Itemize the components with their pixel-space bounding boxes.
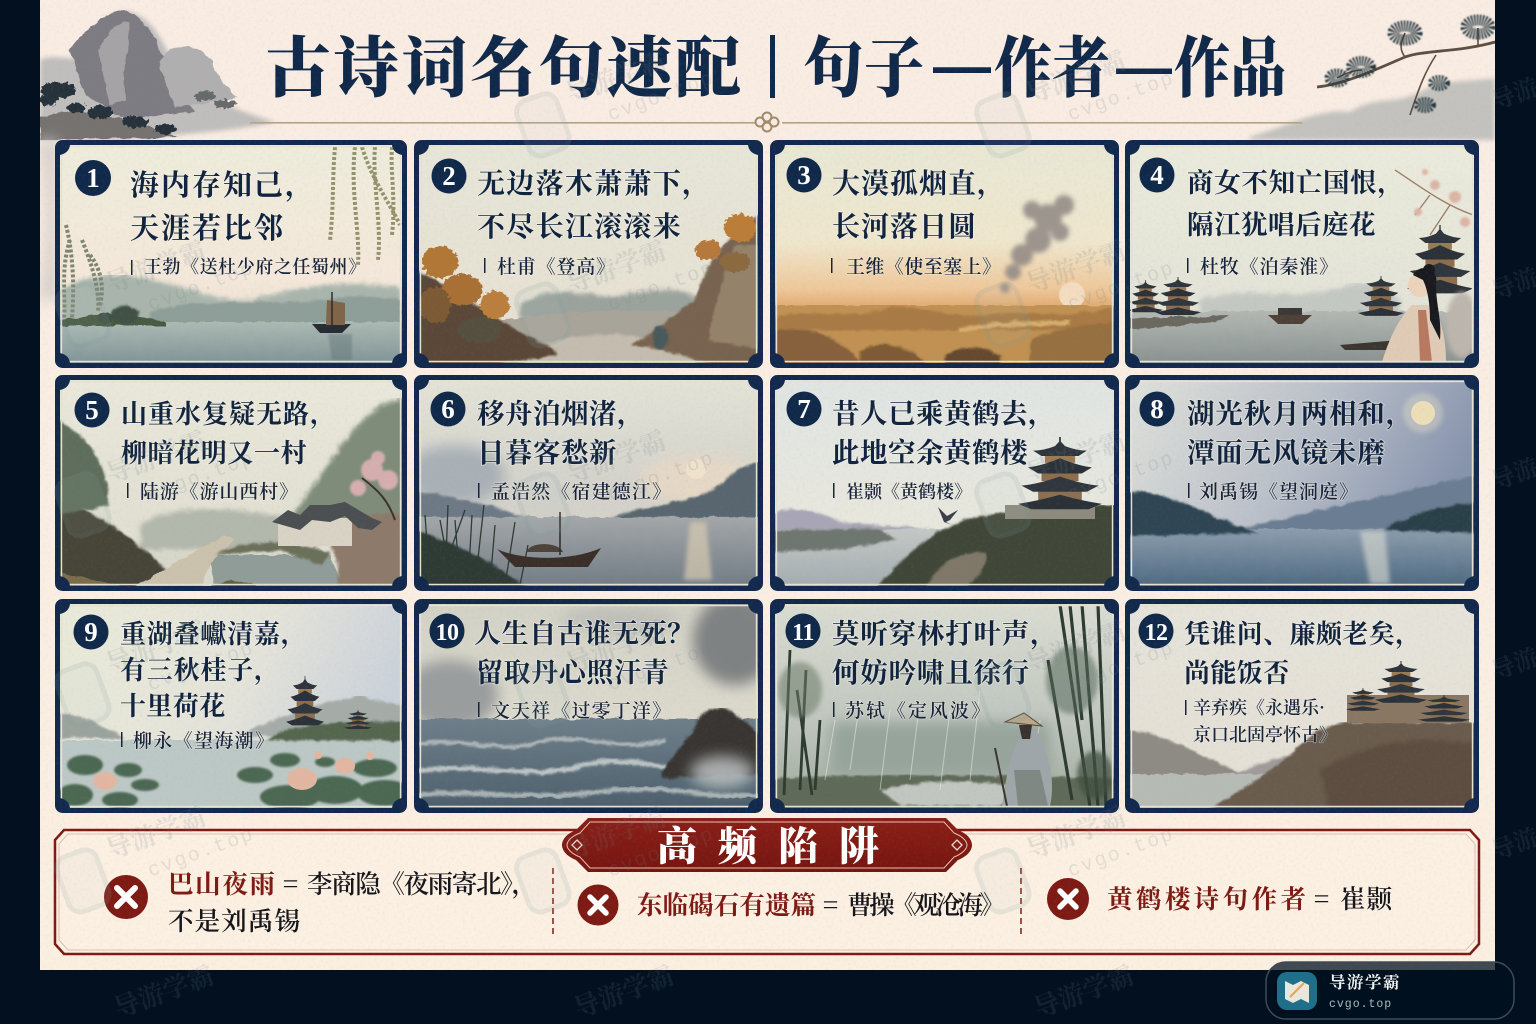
number badge 10: 10 <box>436 620 459 646</box>
number badge 6: 6 <box>441 394 455 424</box>
quote 12 <box>1184 614 1422 690</box>
number badge 5: 5 <box>85 395 99 425</box>
author 3: 王维《使至塞上》 <box>846 252 1001 279</box>
quote 3: 长河落日圆 <box>832 205 977 245</box>
author 12: 京口北固亭怀古》 <box>1193 721 1337 747</box>
title: — <box>1116 35 1172 98</box>
watermark overlay: 导游学霸 <box>108 955 218 1024</box>
quote 9: 十里荷花 <box>120 686 226 723</box>
dashed divider <box>1020 868 1022 935</box>
quote 3: 大漠孤烟直， <box>832 162 1006 202</box>
quote 12: 凭谁问、廉颇老矣， <box>1184 614 1422 651</box>
trap 3: 黄鹤楼诗句作者 <box>1107 880 1306 916</box>
card 7 <box>770 378 1120 590</box>
author 1: 王勃《送杜少府之任蜀州》 <box>144 253 366 279</box>
banner: 高频陷阱: 高频陷阱 <box>657 815 879 872</box>
quote 10: 人生自古谁无死？ <box>474 612 695 651</box>
card 6 <box>405 378 762 590</box>
quote 4: 隔江犹唱后庭花 <box>1187 203 1376 242</box>
card 9 <box>55 602 413 813</box>
watermark overlay: 导游学霸 <box>568 955 678 1024</box>
trap 2: 东临碣石有遗篇 <box>637 886 816 922</box>
logo badge: cvgo.top <box>1329 998 1392 1011</box>
header pine and mountains right <box>1250 20 1495 140</box>
title: 古诗词名句速配 <box>265 15 741 110</box>
title <box>265 15 1286 111</box>
quote 5: 山重水复疑无路， <box>121 394 337 431</box>
quote 6: 日暮客愁新 <box>477 430 617 470</box>
card 3 <box>770 142 1120 368</box>
number badge 8: 8 <box>1150 394 1164 424</box>
author 4: 杜牧《泊秦淮》 <box>1200 252 1338 279</box>
number badge 9: 9 <box>84 617 98 647</box>
trap 1: 巴山夜雨 <box>168 865 275 901</box>
number badge 11 <box>786 614 820 648</box>
quote 5 <box>121 394 337 470</box>
title: 作者 <box>994 15 1110 110</box>
quote 9 <box>120 614 308 723</box>
number badge 4: 4 <box>1150 160 1164 190</box>
quote 4 <box>1187 161 1405 242</box>
quote 8 <box>1187 391 1414 470</box>
author 11: 苏轼《定风波》 <box>845 696 990 723</box>
card 1 <box>55 142 405 367</box>
quote 2 <box>477 162 711 245</box>
trap 2: = <box>823 886 838 922</box>
card 2 <box>415 142 765 368</box>
header landscape left <box>38 10 275 300</box>
title: 作品 <box>1174 16 1286 110</box>
number badge 6 <box>430 392 466 426</box>
quote 9: 重湖叠巘清嘉， <box>120 614 308 651</box>
trap 1 <box>104 865 537 938</box>
author 10: 文天祥《过零丁洋》 <box>491 696 671 723</box>
number badge 10 <box>430 614 464 648</box>
number badge 2 <box>432 158 466 194</box>
trap 2 <box>578 884 1005 926</box>
number badge 12 <box>1138 614 1174 648</box>
panel: high-frequency traps <box>55 815 1479 954</box>
author 12: 辛弃疾《永遇乐· <box>1193 694 1325 720</box>
number badge 5 <box>74 392 110 428</box>
trap 3: 崔颢 <box>1340 880 1393 916</box>
trap 2: 曹操《观沧海》 <box>847 886 1005 922</box>
quote 1: 海内存知己， <box>130 163 316 204</box>
author 9: 柳永《望海潮》 <box>133 726 274 753</box>
quote 2: 无边落木萧萧下， <box>477 162 711 202</box>
number badge 3 <box>786 158 822 192</box>
card 4 <box>1125 142 1479 367</box>
trap 1: 不是刘禹锡 <box>168 902 300 938</box>
number badge 1 <box>75 160 111 196</box>
author 5: 陆游《游山西村》 <box>140 477 298 504</box>
quote 6 <box>477 391 645 470</box>
quote 5: 柳暗花明又一村 <box>121 433 307 470</box>
quote 7: 昔人已乘黄鹤去， <box>832 391 1056 431</box>
quote 2: 不尽长江滚滚来 <box>477 205 682 245</box>
author 7: 崔颢《黄鹤楼》 <box>846 478 972 504</box>
card 5 <box>55 378 405 590</box>
author 8: 刘禹锡《望洞庭》 <box>1199 477 1358 504</box>
quote 1 <box>130 163 316 247</box>
title: 句子 <box>803 16 924 111</box>
quote 11: 莫听穿林打叶声， <box>832 611 1058 651</box>
trap 1: 李商隐《夜雨寄北》， <box>307 865 537 901</box>
card 8 <box>1125 378 1480 590</box>
author 6: 孟浩然《宿建德江》 <box>491 477 671 504</box>
logo badge: 导游学霸 <box>1329 969 1401 993</box>
header divider with knot ornament <box>250 112 1302 132</box>
number badge 2: 2 <box>442 161 456 191</box>
quote 10 <box>474 612 695 690</box>
quote 10: 留取丹心照汗青 <box>476 651 669 690</box>
quote 11 <box>832 611 1058 690</box>
trap 3 <box>1047 878 1393 920</box>
quote 12: 尚能饭否 <box>1184 653 1290 690</box>
quote 8: 湖光秋月两相和， <box>1187 391 1414 431</box>
banner: 高频陷阱 <box>562 815 972 872</box>
quote 3 <box>832 162 1006 245</box>
card 10 <box>402 595 777 812</box>
quote 7 <box>832 391 1056 470</box>
author 12 <box>1185 694 1337 747</box>
number badge 4 <box>1140 158 1174 192</box>
quote 7: 此地空余黄鹤楼 <box>832 430 1030 470</box>
title: — <box>933 34 991 99</box>
watermark overlay: 导游学霸 <box>1028 955 1138 1024</box>
card 12 <box>1125 602 1480 812</box>
quote 11: 何妨吟啸且徐行 <box>832 650 1030 690</box>
quote 4: 商女不知亡国恨， <box>1187 161 1405 200</box>
trap 1: = <box>283 865 298 901</box>
quote 6: 移舟泊烟渚， <box>477 391 645 431</box>
author 2: 杜甫《登高》 <box>497 252 615 279</box>
dashed divider <box>552 868 554 935</box>
number badge 1: 1 <box>86 163 100 193</box>
quote 8: 潭面无风镜未磨 <box>1187 430 1386 470</box>
quote 1: 天涯若比邻 <box>130 206 285 247</box>
trap 3: = <box>1314 880 1329 916</box>
number badge 11: 11 <box>792 620 814 646</box>
number badge 7: 7 <box>797 394 811 424</box>
number badge 3: 3 <box>797 160 811 190</box>
card 11 <box>770 602 1120 812</box>
number badge 9 <box>74 614 108 650</box>
number badge 7 <box>786 392 822 426</box>
number badge 12: 12 <box>1144 620 1168 646</box>
number badge 8 <box>1140 392 1174 426</box>
quote 9: 有三秋桂子， <box>120 650 281 687</box>
logo badge <box>1266 962 1514 1019</box>
